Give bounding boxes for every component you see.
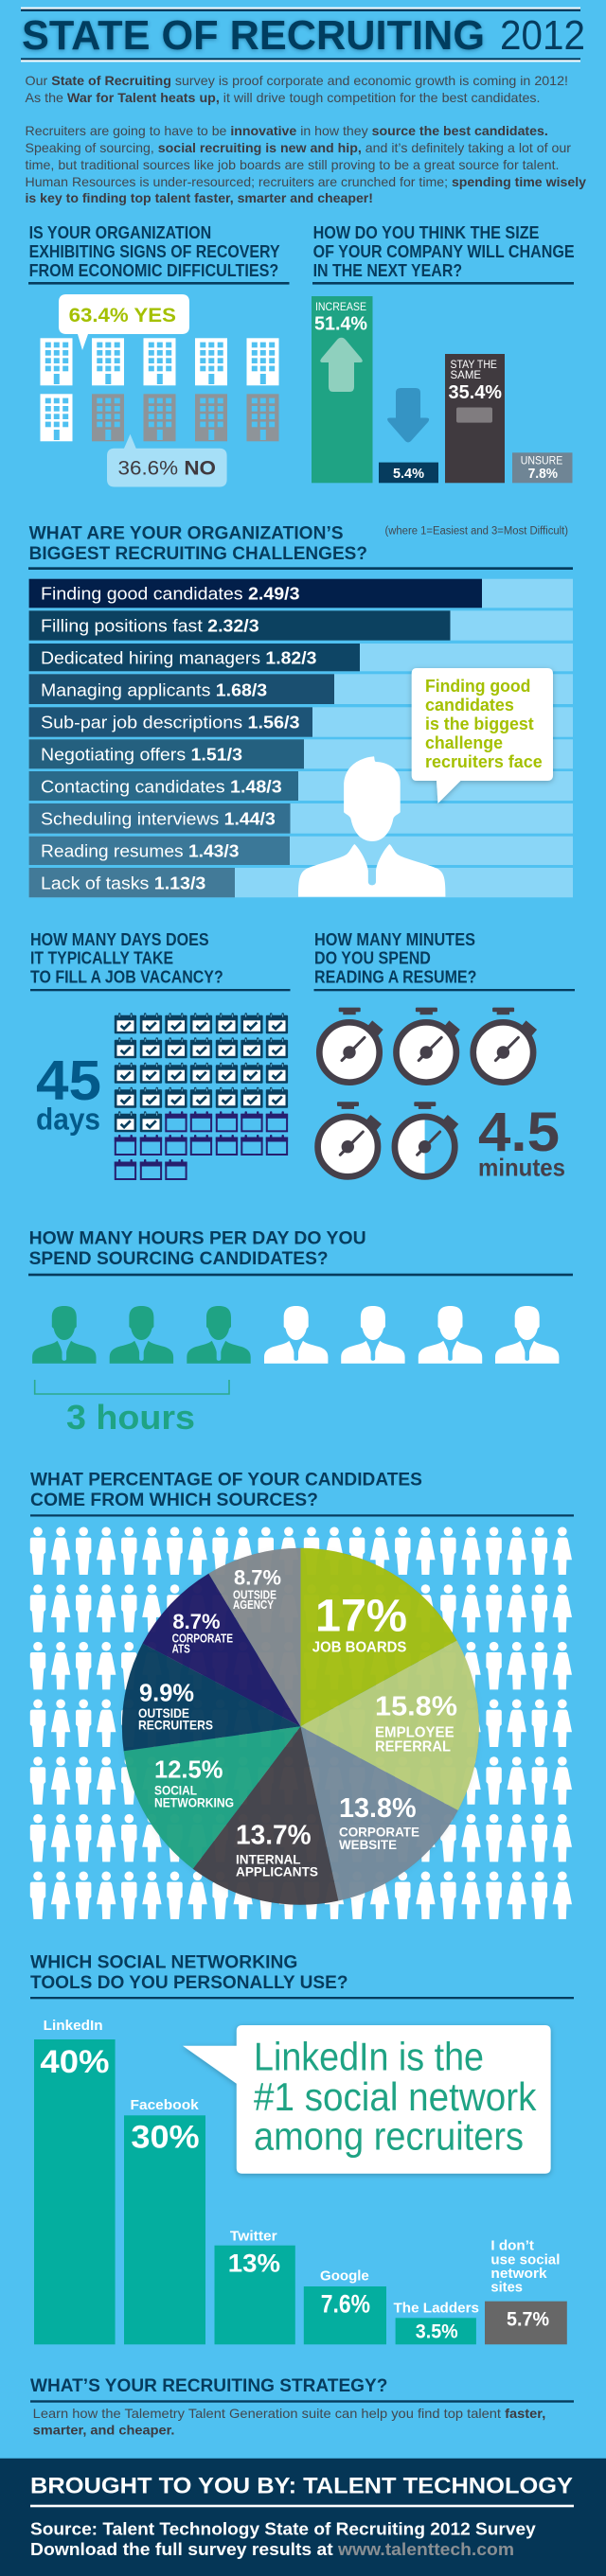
label: corporate ATS: [172, 1610, 233, 1656]
heading: days: [30, 930, 290, 991]
slice: internal applicants: [193, 1726, 338, 1905]
strategy text: smarter, and cheaper.: [33, 2423, 175, 2438]
title banner: 2012: [500, 12, 585, 59]
heading: hours: SPEND SOURCING CANDIDATES?: [29, 1249, 329, 1269]
heading: challenges: WHAT ARE YOUR ORGANIZATION’S: [29, 523, 344, 543]
bar: Facebook: [124, 2097, 205, 2344]
row: scheduling interviews: [29, 803, 573, 834]
label: outside recruiters: OUTSIDE: [138, 1705, 189, 1720]
label: outside recruiters: 9.9%: [139, 1678, 194, 1706]
label: corporate ATS: 8.7%: [172, 1610, 221, 1633]
slice: corporate ATS: [142, 1574, 300, 1726]
callout: 36.6% no: [107, 434, 227, 486]
heading: challenges: [28, 523, 573, 570]
bar: decrease 5.4%: [379, 388, 438, 483]
heading: company size: OF YOUR COMPANY WILL CHANGE: [313, 242, 575, 261]
intro text: As the War for Talent heats up, it will drive tough competition for the best candidates.: [25, 90, 540, 105]
bar: Twitter: Twitter: [230, 2229, 277, 2245]
row: scheduling interviews: Scheduling interviews 1.44/3: [41, 809, 276, 828]
callout: finding good candidates: Finding good: [425, 677, 530, 696]
heading: minutes: [314, 930, 575, 991]
heading: challenges: (where 1=Easiest and 3=Most Difficult): [384, 526, 568, 538]
footer panel: [0, 2459, 606, 2576]
bar: Google: [304, 2267, 386, 2344]
label: corporate website: WEBSITE: [339, 1837, 397, 1852]
bar: The Ladders: [394, 2300, 479, 2344]
bar: The Ladders: 3.5%: [416, 2321, 458, 2343]
heading: recovery: FROM ECONOMIC DIFFICULTIES?: [29, 261, 278, 280]
heading: challenges: BIGGEST RECRUITING CHALLENGES?: [29, 544, 367, 564]
bar: stay the same 35.4%: STAY THE: [451, 360, 497, 371]
people pictogram background: [30, 1527, 572, 1919]
bar: LinkedIn: 40%: [40, 2044, 110, 2080]
heading: sources: COME FROM WHICH SOURCES?: [30, 1491, 318, 1510]
bar: Facebook: 30%: [131, 2119, 200, 2155]
source line: Source: Talent Technology State of Recruiting 2012 Survey: [30, 2519, 536, 2538]
intro text: time, but traditional sources like job boards are still proving to be a great source for talent.: [25, 157, 559, 172]
heading: sources: WHAT PERCENTAGE OF YOUR CANDIDATES: [30, 1470, 422, 1490]
stat: 45 days: 45: [36, 1050, 101, 1112]
callout: finding good candidates: [412, 668, 553, 803]
heading: company size: [312, 223, 575, 285]
heading: recovery: EXHIBITING SIGNS OF RECOVERY: [29, 242, 280, 261]
bar: LinkedIn: LinkedIn: [44, 2018, 103, 2034]
row: reading resumes: Reading resumes 1.43/3: [41, 841, 239, 860]
bar: increase 51.4%: 51.4%: [314, 314, 367, 335]
heading: days: HOW MANY DAYS DOES: [30, 930, 209, 949]
title banner: STATE OF RECRUITING: [22, 12, 485, 59]
row: reading resumes: [29, 837, 573, 865]
heading: hours: HOW MANY HOURS PER DAY DO YOU: [29, 1228, 366, 1248]
pie chart: sources: [122, 1548, 479, 1905]
stat: 4.5 minutes: 4.5: [478, 1102, 560, 1163]
bar: stay the same 35.4%: SAME: [451, 370, 481, 381]
label: outside agency: 8.7%: [234, 1565, 281, 1589]
heading: sources: [30, 1470, 574, 1516]
bar: Twitter: [214, 2229, 295, 2344]
callout: finding good candidates: recruiters face: [425, 752, 543, 771]
heading: minutes: HOW MANY MINUTES: [314, 930, 475, 949]
heading: days: TO FILL A JOB VACANCY?: [30, 968, 223, 987]
bar: unsure 7.8%: UNSURE: [521, 456, 563, 468]
intro text: Our State of Recruiting survey is proof corporate and economic growth is coming in 2012!: [25, 73, 568, 88]
slice: job boards: [300, 1548, 457, 1726]
callout: finding good candidates: is the biggest: [425, 715, 534, 733]
row: finding good candidates: Finding good candidates 2.49/3: [41, 584, 299, 603]
heading: hours: [28, 1228, 573, 1276]
label: internal applicants: [236, 1820, 318, 1879]
label: internal applicants: APPLICANTS: [236, 1864, 318, 1879]
row: negotiating offers: Negotiating offers 1.51/3: [41, 745, 242, 764]
stopwatch icons: 4.5 minutes: [318, 1008, 537, 1176]
label: social networking: NETWORKING: [154, 1794, 234, 1809]
label: outside agency: OUTSIDE: [233, 1588, 276, 1601]
bracket and 3 hours label: [35, 1380, 229, 1437]
icon: person silhouette: [298, 756, 445, 897]
bar: unsure 7.8%: [512, 452, 572, 483]
strategy text: Learn how the Talemetry Talent Generation suite can help you find top talent faster,: [33, 2406, 545, 2421]
bar: no social network sites: [485, 2237, 567, 2344]
row: sub-par job descriptions: [29, 707, 573, 737]
callout: 36.6% no: 36.6% NO: [117, 456, 216, 479]
label: employee referral: 15.8%: [375, 1692, 457, 1722]
bar: Google: Google: [320, 2267, 369, 2284]
row: lack of tasks: Lack of tasks 1.13/3: [41, 873, 205, 892]
intro text: is key to finding top talent faster, smarter and cheaper!: [25, 190, 373, 205]
row: contacting candidates: Contacting candidates 1.48/3: [41, 777, 282, 796]
label: outside recruiters: RECRUITERS: [138, 1718, 213, 1733]
bar: stay the same 35.4%: [445, 354, 505, 483]
label: internal applicants: 13.7%: [236, 1820, 312, 1850]
row: contacting candidates: [29, 771, 573, 801]
callout: finding good candidates: challenge: [425, 733, 503, 752]
label: employee referral: [375, 1692, 457, 1756]
bar: no social network sites: I don’t: [490, 2237, 534, 2253]
slice: employee referral: [300, 1641, 479, 1810]
label: corporate website: [339, 1793, 419, 1852]
intro text: Human Resources is under-resourced; recruiters are crunched for time; spending time wisely: [25, 174, 586, 189]
bar: no social network sites: use social: [490, 2251, 560, 2267]
heading: recovery: IS YOUR ORGANIZATION: [29, 223, 211, 242]
label: employee referral: EMPLOYEE: [375, 1724, 454, 1740]
callout: finding good candidates: candidates: [425, 696, 514, 715]
bar: increase 51.4%: [312, 296, 373, 483]
bar: Facebook: Facebook: [131, 2097, 199, 2113]
label: corporate ATS: CORPORATE: [172, 1632, 233, 1646]
label: job boards: JOB BOARDS: [312, 1639, 406, 1655]
footer heading: BROUGHT TO YOU BY: TALENT TECHNOLOGY: [30, 2473, 573, 2498]
bracket and 3 hours label: 3 hours: [66, 1398, 195, 1437]
bar: no social network sites: network: [490, 2266, 547, 2282]
slice: social networking: [124, 1726, 300, 1869]
bar: no social network sites: 5.7%: [507, 2309, 549, 2331]
heading: company size: HOW DO YOU THINK THE SIZE: [313, 223, 539, 242]
calendar grid: 45 days: [115, 1013, 288, 1179]
callout: 63.4% yes: [59, 294, 189, 350]
stat: 45 days: days: [36, 1102, 100, 1136]
label: employee referral: REFERRAL: [375, 1739, 451, 1756]
bar: The Ladders: The Ladders: [394, 2300, 479, 2316]
label: outside agency: AGENCY: [233, 1598, 275, 1612]
label: social networking: SOCIAL: [154, 1783, 197, 1798]
slice: corporate website: [300, 1726, 458, 1900]
row: sub-par job descriptions: Sub-par job descriptions 1.56/3: [41, 713, 299, 732]
callout: LinkedIn is #1: [183, 2025, 551, 2174]
label: corporate ATS: ATS: [172, 1643, 190, 1656]
heading: recovery: [28, 223, 290, 285]
stat: 4.5 minutes: minutes: [478, 1154, 565, 1182]
bar: decrease 5.4%: 5.4%: [393, 467, 424, 482]
building icons: [40, 338, 278, 441]
intro text: Speaking of sourcing, social recruiting is new and hip, and it’s definitely taking a lot of our: [25, 140, 571, 155]
slice: outside recruiters: [122, 1644, 300, 1751]
row: dedicated hiring managers: Dedicated hiring managers 1.82/3: [41, 648, 316, 667]
row: dedicated hiring managers: [29, 644, 573, 671]
callout: LinkedIn is #1: among recruiters: [254, 2114, 524, 2159]
row: managing applicants: Managing applicants 1.68/3: [41, 680, 267, 699]
row: filling positions fast: Filling positions fast 2.32/3: [41, 616, 259, 635]
callout: LinkedIn is #1: #1 social network: [254, 2074, 537, 2119]
label: job boards: 17%: [315, 1591, 407, 1641]
row: filling positions fast: [29, 610, 573, 641]
bar: unsure 7.8%: 7.8%: [528, 467, 558, 482]
callout: LinkedIn is #1: LinkedIn is the: [254, 2035, 484, 2079]
label: social networking: 12.5%: [154, 1755, 223, 1783]
bar: Google: 7.6%: [321, 2289, 370, 2318]
label: social networking: [154, 1755, 234, 1809]
bar: LinkedIn: [34, 2018, 116, 2344]
label: outside recruiters: [138, 1678, 213, 1733]
heading: minutes: READING A RESUME?: [314, 968, 476, 987]
callout: 63.4% yes: 63.4% YES: [69, 304, 176, 326]
row: managing applicants: [29, 674, 573, 704]
strategy text: [33, 2406, 545, 2438]
row: finding good candidates: [29, 579, 573, 608]
label: corporate website: 13.8%: [339, 1793, 417, 1824]
bar: stay the same 35.4%: 35.4%: [449, 382, 502, 403]
bar: increase 51.4%: INCREASE: [315, 302, 366, 313]
label: corporate website: CORPORATE: [339, 1825, 419, 1840]
heading: company size: IN THE NEXT YEAR?: [313, 261, 462, 280]
heading: social tools: TOOLS DO YOU PERSONALLY USE?: [30, 1973, 348, 1993]
bar chart: social networks: [34, 2018, 567, 2344]
intro text: Recruiters are going to have to be innovative in how they source the best candidates.: [25, 123, 548, 138]
bar chart: challenges: [29, 579, 573, 897]
stat: 4.5 minutes: [478, 1102, 565, 1182]
person icons: hours: [32, 1306, 559, 1364]
heading: social tools: WHICH SOCIAL NETWORKING: [30, 1952, 297, 1972]
slice: outside agency: [208, 1548, 300, 1726]
label: outside agency: [233, 1565, 281, 1612]
row: lack of tasks: [29, 868, 573, 897]
bar: Twitter: 13%: [228, 2250, 280, 2278]
heading: recruiting strategy: WHAT’S YOUR RECRUITING STRATEGY?: [30, 2376, 387, 2396]
heading: social tools: [30, 1952, 574, 1999]
row: negotiating offers: [29, 739, 573, 768]
download line: Download the full survey results at www.talenttech.com: [30, 2540, 514, 2559]
heading: minutes: DO YOU SPEND: [314, 949, 431, 968]
bar: no social network sites: sites: [490, 2280, 523, 2296]
label: internal applicants: INTERNAL: [236, 1851, 301, 1866]
pie labels: [138, 1565, 457, 1879]
intro text: [25, 73, 586, 205]
heading: days: IT TYPICALLY TAKE: [30, 949, 173, 968]
stat: 45 days: [36, 1050, 101, 1136]
